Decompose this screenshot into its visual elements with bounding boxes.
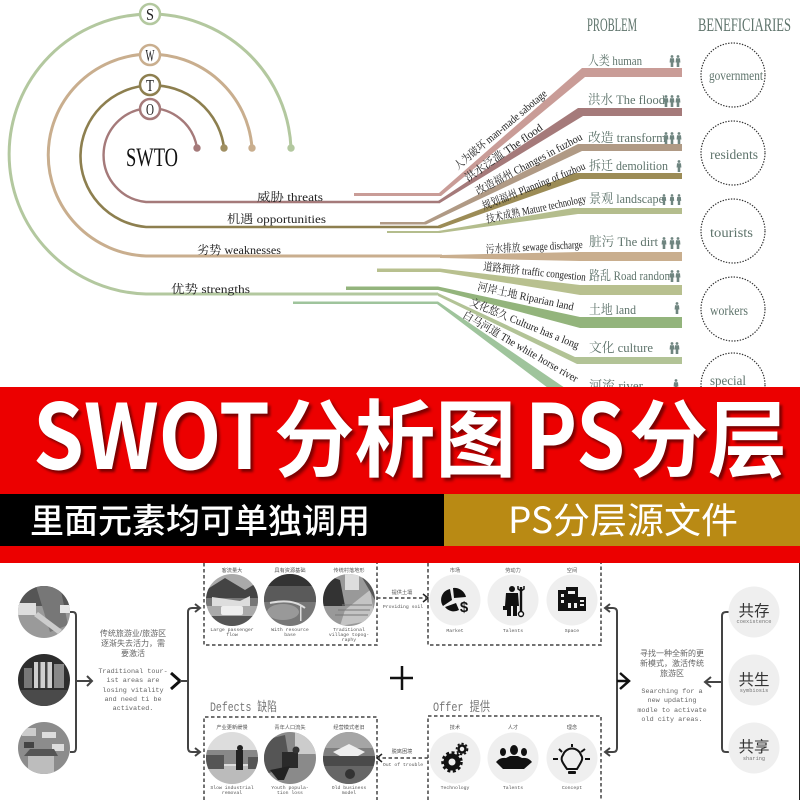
offer labels: 人才 [508,723,518,731]
photo: merit 1 [206,574,258,626]
merit labels: 传统村落地形 [333,566,365,574]
flow: transform [380,144,682,224]
beneficiary: government: government [709,69,763,84]
arc: opportunities role [104,108,440,202]
merit captions: raphy [342,637,356,643]
concept: sharing: sharing [743,756,765,762]
text: search chinese: 新模式，激活传统 [640,658,704,668]
title [33,365,787,495]
text: intro english: ist areas are [106,677,160,685]
label: culture: 文化悠久 Culture has a long [468,295,582,352]
photo: left 2 [18,654,70,706]
chevron: to search text [617,673,629,689]
flow: culture [438,293,682,364]
label: strengths: 优势 strengths [171,281,250,296]
title: 分层 [629,374,787,495]
merit captions: Traditional [333,627,365,633]
person icons [662,55,681,391]
flow: demolition [438,173,682,228]
banner: red title band [0,365,800,563]
defect captions: Youth popula- [271,785,309,791]
heading: problem: PROBLEM [587,15,637,36]
text: search english: Searching for a [641,688,703,696]
market captions top: 市场 [450,566,460,574]
problem: land: 土地 land [589,302,636,317]
title: PS [525,365,625,495]
market captions bottom: Market [446,628,464,634]
label: sewage: 污水排放 sewage discharge [485,237,583,256]
gold subtitle bar: PS分层源文件 [508,492,738,544]
text: intro english: losing vitality [102,687,164,695]
icon: space buildings [546,574,598,626]
arc: threats role [80,85,440,227]
defect captions: removal [222,790,242,796]
problem: human: 人类 human [588,53,642,68]
text: intro english: and need ti be [104,696,162,704]
merit labels: 客流量大 [222,566,242,574]
label: technology: 技术成熟 Mature technology [485,191,588,226]
beneficiary: workers: workers [710,304,748,319]
flow: flood [438,108,682,203]
title: SWOT [33,365,270,495]
box: defects [204,717,377,800]
defect captions: tion loss [277,790,303,796]
photo: defect 3 [323,732,375,784]
arc: strengths [9,14,438,294]
flow: road [377,268,682,295]
text: intro english: Traditional tour- [98,668,168,676]
arc: weaknesses [48,54,442,256]
merit captions: flow [226,632,238,638]
text: search chinese: 寻找一种全新的更 [640,648,704,658]
photo: left 3 [18,722,70,774]
icon: concept bulb [546,732,598,784]
icon: talents worker [488,574,538,626]
concept: sharing [728,722,780,774]
merit captions: village topog- [329,632,369,638]
problem: transform: 改造 transform [588,130,666,145]
defect captions: Slow industrial [210,785,254,791]
offer captions: Technology [441,785,470,791]
heading: offer: Offer 提供 [433,699,490,715]
merit captions: With resource [271,627,309,633]
node: T: T [146,76,154,95]
concept: coexistence: 共存 [738,602,770,620]
offer captions: Concept [562,785,582,791]
label: sabotage: 人为破坏 man-made sabotage [451,86,550,172]
concept: coexistence [728,586,780,638]
icon: technology gears [430,732,480,784]
merit captions: Large passenger [210,627,254,633]
text: search chinese [640,648,704,678]
label: planning: 规划福州 Planning of fuzhou [480,158,587,213]
connector: out of trouble: 脱离困境 [392,747,412,755]
text: search english: old city areas. [641,716,703,724]
node: W: W [146,46,155,65]
bracket: left [70,612,92,752]
merit labels: 具有资源基础 [274,566,306,574]
problem: road: 路乱 Road random [589,268,673,283]
merit captions [210,627,369,643]
defect labels [216,723,365,731]
label: opportunities: 机遇 opportunities [227,211,326,226]
beneficiary: tourists: tourists [710,226,753,241]
connector: out of trouble [377,747,428,768]
centre label: SWTO [126,143,178,172]
label: threats: 威胁 threats [257,189,323,204]
market captions top [450,566,577,574]
concept: symbiosis [728,654,780,706]
defect captions [210,785,366,796]
text: search english: modle to activate [637,707,707,715]
heading: defects: Defects 缺陷 [210,700,277,715]
bracket: split [180,604,200,756]
connector: out of trouble: Out of trouble [383,762,423,768]
beneficiary: tourists [701,199,765,263]
defect labels: 青年人口流失 [274,723,306,731]
beneficiary: residents [701,121,765,185]
photo: defect 1 [206,732,258,784]
problem: flood: 洪水 The flood [588,92,665,107]
merit captions: base [284,632,296,638]
node: S [140,4,160,24]
problem: landscape: 景观 landscape [589,191,664,206]
bracket: right outer [705,612,729,752]
node: O: O [146,100,154,119]
offer captions: Talents [503,785,523,791]
bracket: right inner [605,604,617,756]
text: intro chinese [100,628,166,658]
defect captions: model [342,790,356,796]
plus sign [390,666,413,690]
market captions bottom [446,628,579,634]
beneficiary: government [701,43,765,107]
beneficiary: special [701,353,765,417]
black subtitle bar: 里面元素均可单独调用 [30,494,370,543]
market captions bottom: Space [565,628,579,634]
offer captions [441,785,582,791]
node: W [140,45,160,65]
text: intro chinese: 传统旅游业/旅游区 [100,628,166,638]
problem labels [588,53,673,393]
label: riparian: 河岸土地 Riparian land [476,279,576,313]
beneficiary: residents: residents [710,148,758,163]
icon: market [430,574,480,626]
offer labels: 技术 [450,723,460,731]
box: market offers [428,563,601,645]
gold subtitle bar [444,492,800,546]
icon: talents group [488,732,538,784]
box: offer [428,716,601,800]
text: intro chinese: 要激活 [121,648,145,658]
market captions top: 空间 [567,566,577,574]
defect captions: Old business [332,785,366,791]
merit labels [222,566,365,574]
connector: providing soil: 提供土壤 [392,588,412,596]
label: changes: 改造福州 Changes in fuzhou [473,129,585,198]
chevron: to merits and defects [171,673,180,689]
concept: symbiosis: 共生 [738,671,770,689]
connector: providing soil [377,588,428,610]
label: traffic: 道路拥挤 traffic congestion [483,259,587,284]
photo: left 1 [18,586,70,638]
problem: culture: 文化 culture [589,340,653,355]
flow: land [346,286,682,328]
defect labels: 经营模式老旧 [333,723,365,731]
concept: coexistence: coexistence [737,619,771,625]
flow: dirt [440,252,682,261]
label: flood: 洪水泛滥 The flood [462,120,545,184]
edge line [799,563,800,800]
node: T [140,75,160,95]
text: search english [637,688,707,724]
market captions top: 劳动力 [505,566,521,574]
photo: merit 3 [323,574,375,626]
panel: SWOT flow diagram [9,4,791,417]
flow: human [354,68,682,196]
panel: renewal diagram [18,563,800,800]
defect labels: 产业更新缓慢 [216,723,248,731]
rotated labels [451,86,588,385]
photo: merit 2 [264,574,316,626]
label: weaknesses: 劣势 weaknesses [197,242,281,257]
problem: dirt: 脏污 The dirt [589,234,658,249]
node: S: S [146,5,154,24]
photo: defect 2 [264,732,316,784]
offer labels: 理念 [567,723,577,731]
concept: sharing: 共享 [738,738,770,756]
text: intro english: activated. [113,705,153,713]
text: search chinese: 旅游区 [660,668,684,678]
offer labels [450,723,577,731]
node: O [140,99,160,119]
text: search english: new updating [648,697,696,705]
text: intro english [98,668,168,713]
beneficiary: workers [701,277,765,341]
text: intro chinese: 逐渐失去活力，需 [101,638,165,648]
flow: river [293,302,565,388]
connector: providing soil: Providing soil [383,604,423,610]
icon: market: $ [460,599,469,616]
box: merits [204,563,377,645]
market captions bottom: Talents [503,628,523,634]
beneficiary: special: special [710,374,746,389]
title: 分析图 [274,374,516,495]
flow: landscape [387,208,682,233]
label: river: 白马河道 The white horse river [460,308,581,385]
problem: demolition: 拆迁 demolition [589,158,668,173]
problem: river: 河流 river [589,378,644,393]
concept: symbiosis: symbiosis [740,688,768,694]
